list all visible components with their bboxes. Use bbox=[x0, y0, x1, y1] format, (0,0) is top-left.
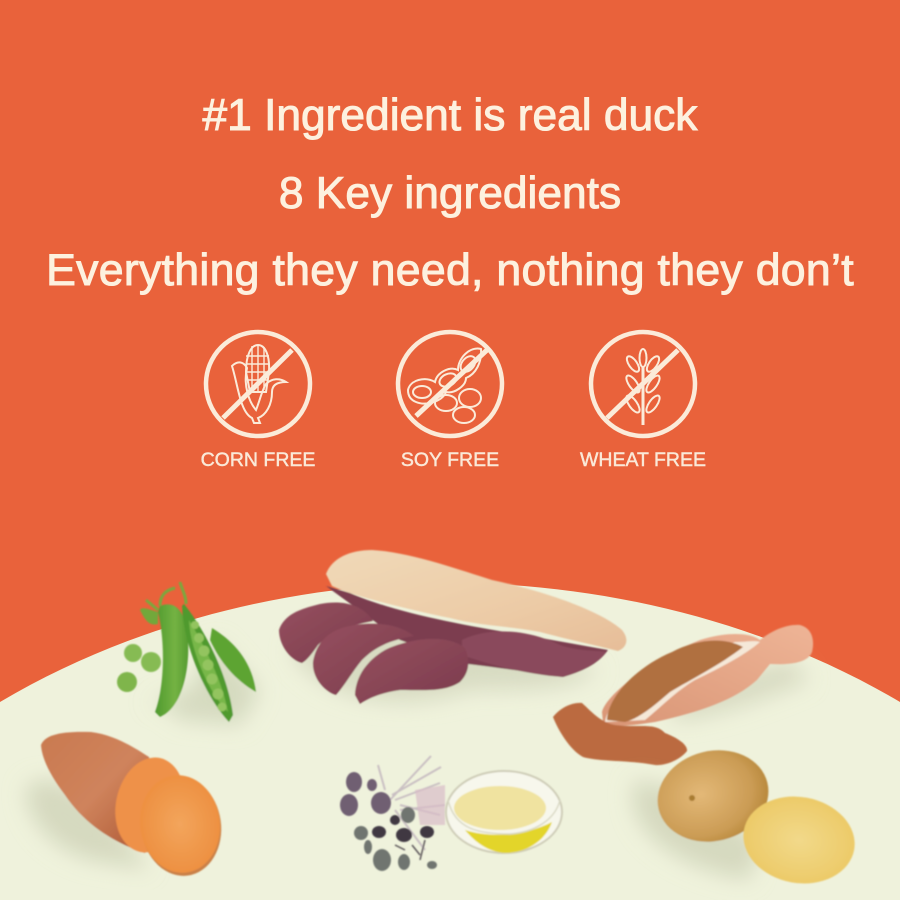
heading: key ingredients: 8 Key ingredients bbox=[279, 169, 621, 218]
heading: real duck: #1 Ingredient is real duck bbox=[203, 91, 697, 140]
heading: everything they need: Everything they need, nothing they don’t bbox=[46, 246, 854, 295]
icon: soy free bbox=[398, 332, 502, 436]
food: duck breast bbox=[279, 550, 626, 704]
icon: corn free bbox=[206, 332, 310, 436]
food: potatoes bbox=[633, 739, 862, 892]
food: sweet potato bbox=[25, 732, 228, 881]
icon: wheat free bbox=[591, 332, 695, 436]
label: wheat free: WHEAT FREE bbox=[580, 449, 706, 471]
food: microgreens bbox=[340, 756, 445, 871]
label: corn free: CORN FREE bbox=[201, 449, 315, 471]
food: oil bowl bbox=[446, 771, 562, 853]
label: soy free: SOY FREE bbox=[401, 449, 499, 471]
food: peas bbox=[117, 582, 260, 725]
food: ground flaxseed scoop bbox=[553, 625, 813, 765]
cream background curve bbox=[0, 583, 900, 900]
